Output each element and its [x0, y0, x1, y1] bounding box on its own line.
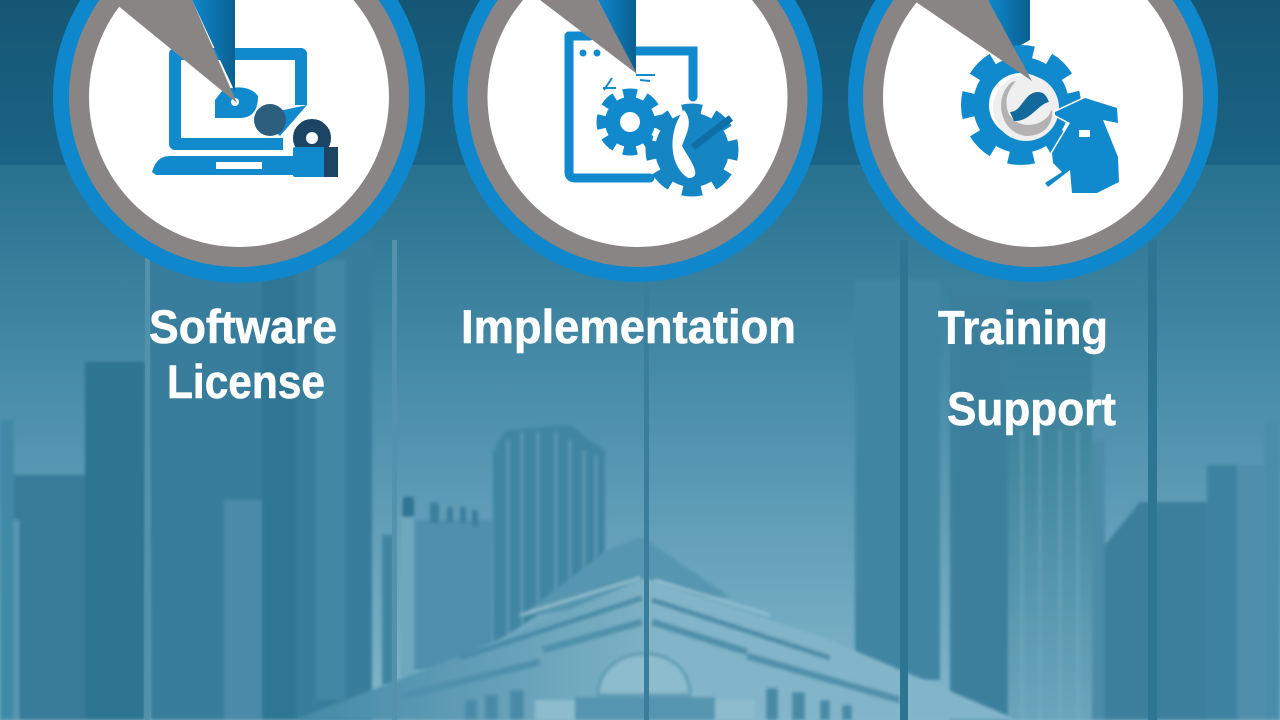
panel: training and support — [848, 0, 1218, 435]
pie wedge: gray — [913, 0, 1032, 81]
label: software license: Software — [149, 300, 337, 353]
panel: software license — [53, 0, 425, 408]
icon: gear and person — [968, 52, 1119, 193]
circle badge — [452, 0, 822, 282]
window frames — [145, 240, 1157, 720]
central building — [294, 537, 1011, 720]
pie wedge: blue — [988, 0, 1030, 50]
icon: application window with gears — [569, 36, 733, 191]
label: software license — [149, 300, 337, 408]
pie wedge: gray — [111, 0, 237, 103]
buildings: right towers — [855, 280, 1280, 720]
pie wedge: blue — [192, 0, 235, 92]
label: support: Support — [947, 382, 1116, 435]
pie wedge: blue — [598, 0, 636, 74]
circle badge — [848, 0, 1218, 282]
label: training: Training — [938, 301, 1108, 354]
icon: laptop with padlock — [152, 54, 338, 177]
pie wedge: gray — [540, 0, 637, 74]
label: implementation: Implementation — [461, 300, 796, 353]
top dark band — [0, 0, 1280, 165]
panel: implementation — [452, 0, 822, 353]
label: software license: License — [167, 355, 325, 408]
buildings: left towers — [0, 240, 605, 720]
circle badge — [53, 0, 425, 283]
